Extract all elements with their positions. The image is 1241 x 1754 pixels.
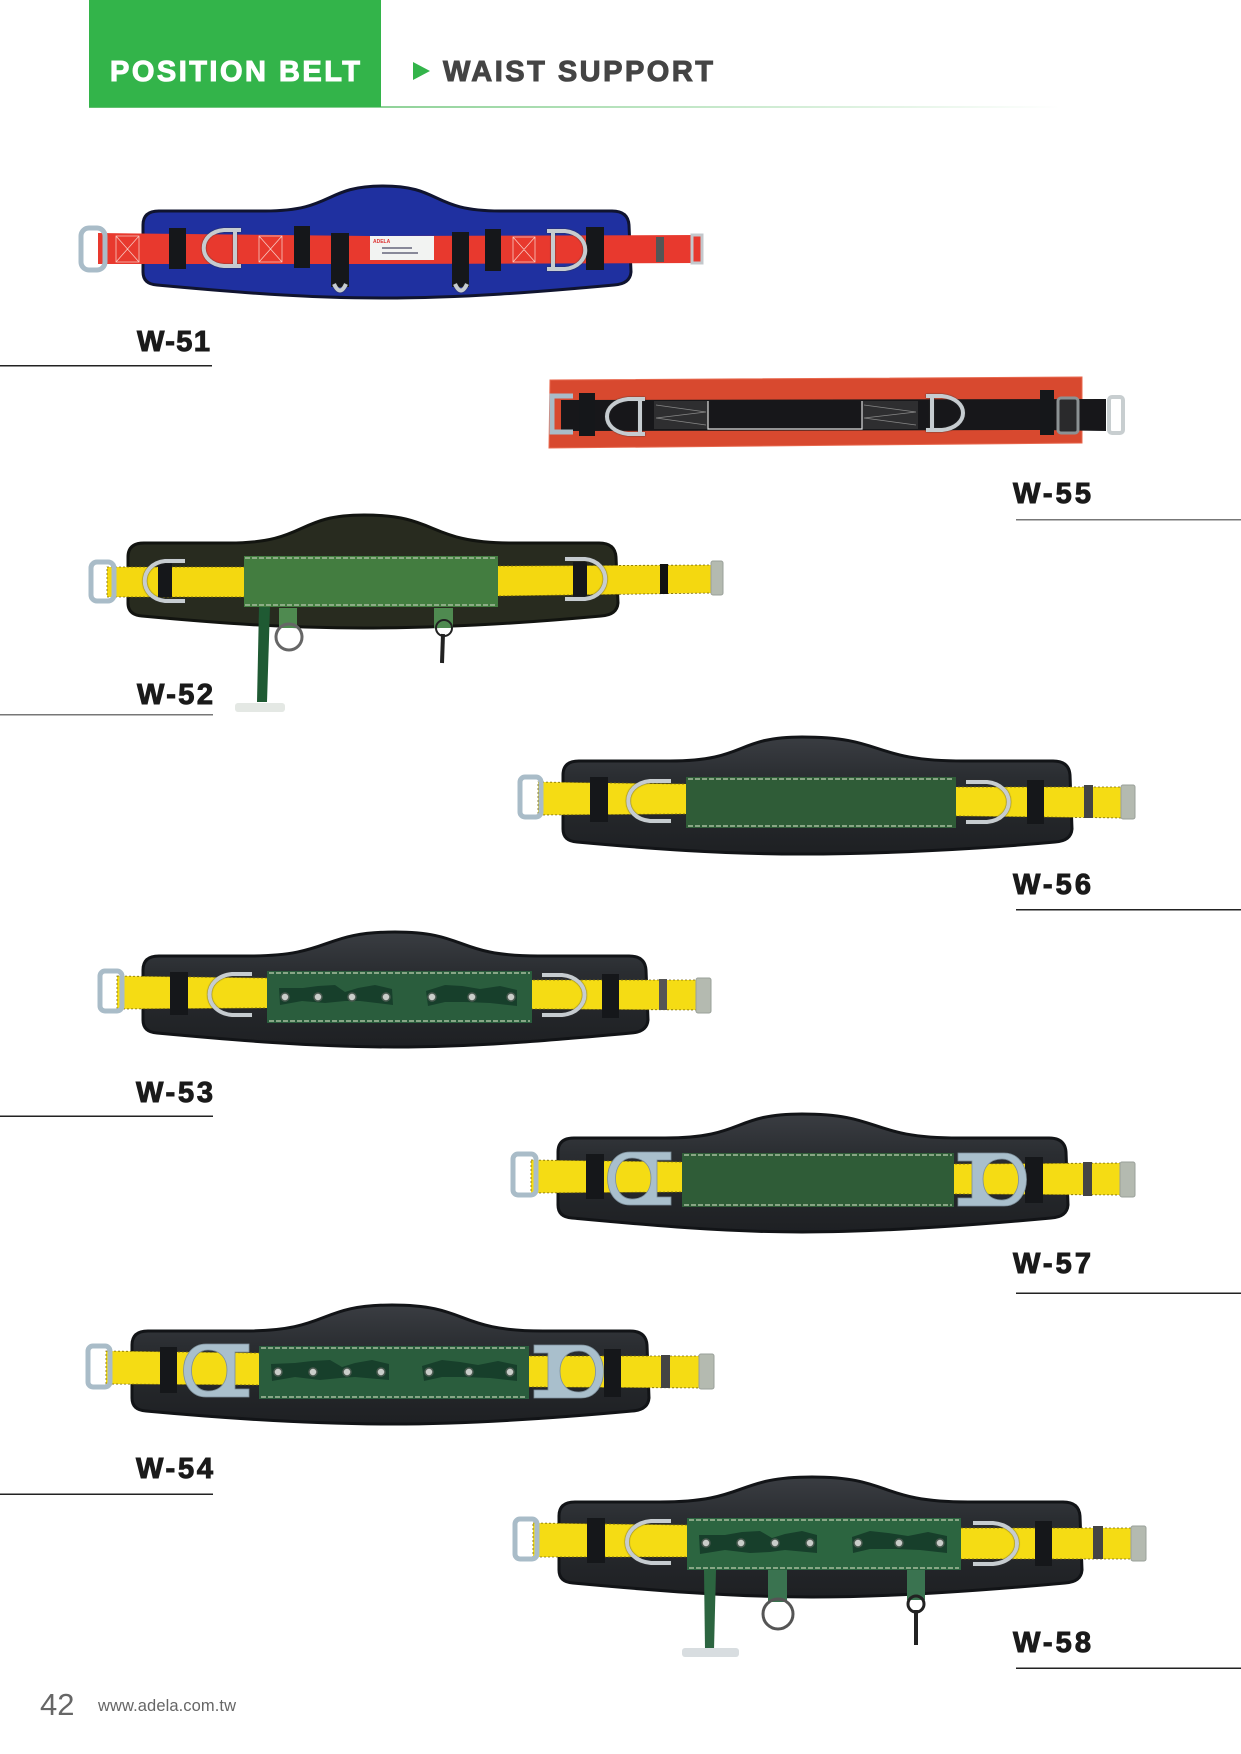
pad — [143, 932, 648, 1047]
snap hook tab — [907, 1570, 925, 1645]
model label W-57: W-57 — [1013, 1248, 1091, 1280]
belt W-58 — [515, 1477, 1146, 1657]
buckles and loops — [552, 390, 1123, 436]
tool loops left — [699, 1531, 817, 1554]
green panel with tool loops — [687, 1518, 961, 1570]
section tab: position belt — [89, 0, 381, 107]
hanging strap and T handle — [235, 607, 285, 712]
loops — [586, 1154, 1043, 1203]
webbing section — [654, 401, 918, 429]
pad — [558, 1114, 1068, 1232]
belt W-57 — [513, 1114, 1135, 1232]
yellow strap — [117, 976, 702, 1010]
model label W-56: W-56 — [1013, 869, 1091, 901]
D-rings — [627, 1521, 1017, 1564]
loops — [170, 972, 619, 1018]
yellow strap — [531, 1160, 1124, 1195]
loops — [590, 777, 1044, 824]
green panel — [244, 556, 498, 607]
green panel with tool loops — [267, 971, 532, 1023]
buckles — [520, 777, 1135, 819]
yellow strap — [107, 565, 712, 597]
website url: www.adela.com.tw — [97, 1697, 236, 1715]
model label W-53: W-53 — [136, 1077, 213, 1109]
header underline — [89, 106, 1060, 108]
buckles — [100, 971, 711, 1013]
hanging strap and T handle — [682, 1570, 739, 1657]
buckles — [513, 1154, 1135, 1197]
double D plates — [608, 1152, 1026, 1206]
tool loops left — [279, 985, 393, 1005]
yellow strap — [538, 782, 1124, 818]
tool loops right — [422, 1360, 517, 1381]
green panel with tool loops — [259, 1346, 529, 1399]
tool loops left — [271, 1360, 389, 1381]
padded blue back — [143, 186, 631, 298]
model label W-52: W-52 — [137, 679, 213, 711]
buckles — [81, 228, 702, 270]
loops — [160, 1347, 621, 1397]
model label W-54: W-54 — [136, 1453, 213, 1485]
D-rings — [628, 781, 1009, 822]
buckles — [91, 561, 723, 601]
tool loops right — [426, 985, 517, 1006]
tool loops right — [852, 1531, 947, 1553]
belt W-54 — [88, 1305, 714, 1424]
red strap — [98, 233, 702, 264]
model label W-51: W-51 — [137, 326, 210, 358]
subtitle: waist support: WAIST SUPPORT — [443, 56, 713, 88]
buckles — [88, 1346, 714, 1389]
pad — [563, 737, 1072, 854]
ring tab — [763, 1570, 793, 1629]
strap stitching — [116, 236, 535, 262]
belt W-52 — [91, 515, 723, 712]
green panel — [682, 1153, 954, 1207]
loops — [158, 562, 587, 597]
D-rings — [204, 230, 585, 290]
icon: green arrow — [413, 62, 430, 80]
D-rings — [210, 974, 584, 1015]
double D plates — [184, 1344, 604, 1398]
green panel — [686, 777, 956, 828]
pad — [559, 1477, 1082, 1597]
page number: 42 — [40, 1687, 74, 1722]
belt W-53 — [100, 932, 711, 1047]
belt W-55 — [549, 377, 1123, 448]
black loops — [169, 226, 604, 287]
product label — [370, 236, 434, 260]
yellow strap — [106, 1351, 708, 1388]
product label: ADELA — [373, 239, 391, 245]
loops — [587, 1518, 1052, 1566]
header band — [89, 0, 1060, 108]
D-rings — [607, 396, 963, 434]
model label W-55: W-55 — [1013, 478, 1091, 510]
yellow strap — [533, 1523, 1136, 1559]
pad — [128, 515, 618, 628]
pad — [132, 1305, 649, 1424]
snap hook tab — [434, 608, 453, 663]
belt W-51 — [81, 186, 702, 298]
orange pad — [549, 377, 1082, 448]
model label W-58: W-58 — [1013, 1627, 1091, 1659]
black strap — [561, 399, 1106, 431]
belt W-56 — [520, 737, 1135, 854]
section tab: position belt: POSITION BELT — [110, 56, 360, 88]
buckles — [515, 1519, 1146, 1561]
ring tab — [276, 608, 302, 650]
D-rings — [145, 559, 605, 601]
